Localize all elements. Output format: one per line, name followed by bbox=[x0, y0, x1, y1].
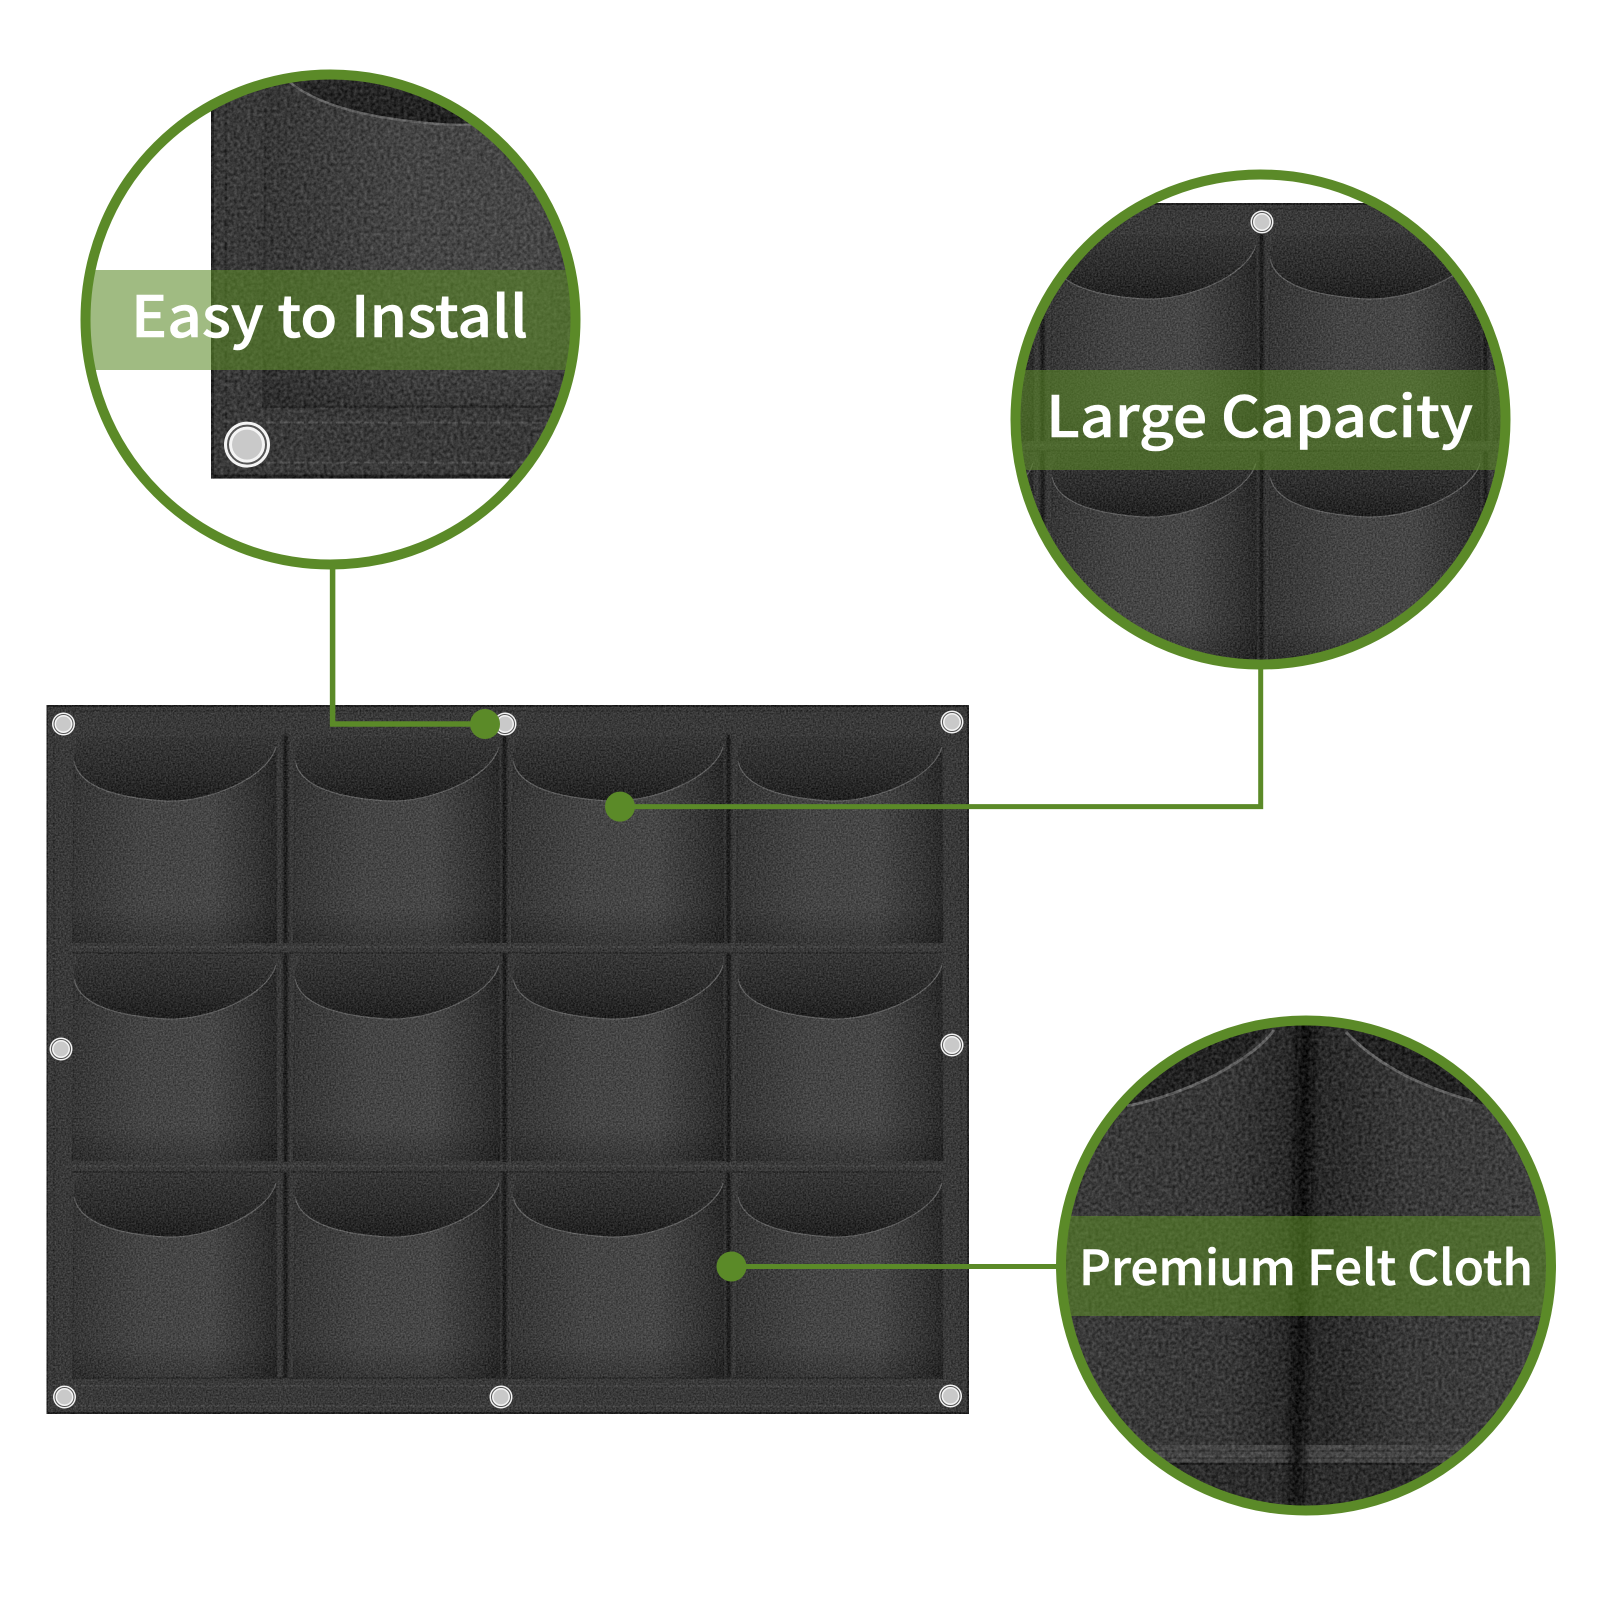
leader line: large capacity bbox=[605, 669, 1261, 822]
leader line: premium felt cloth bbox=[716, 1252, 1057, 1282]
callout: Easy to Install: Easy to Install bbox=[131, 272, 528, 354]
close-up felt texture bbox=[1066, 1026, 1546, 1506]
main product: 12-pocket felt planter panel bbox=[46, 705, 969, 1414]
callout: Easy to Install bbox=[80, 70, 580, 570]
callout: Premium Felt Cloth bbox=[1046, 1016, 1566, 1525]
callout: Premium Felt Cloth: Premium Felt Cloth bbox=[1079, 1229, 1533, 1299]
callout: Large Capacity bbox=[1010, 170, 1510, 670]
leader line: easy to install bbox=[333, 569, 500, 739]
callout: Large Capacity: Large Capacity bbox=[1046, 372, 1473, 454]
